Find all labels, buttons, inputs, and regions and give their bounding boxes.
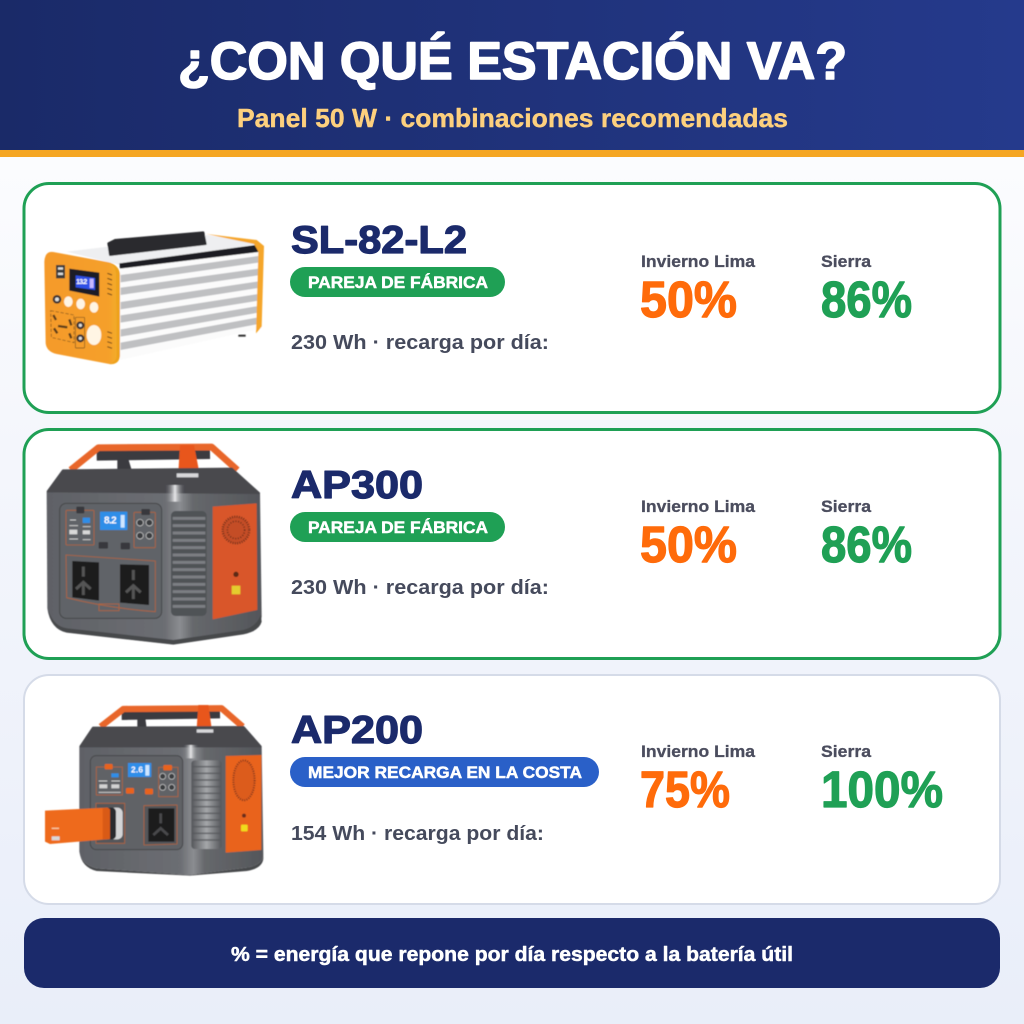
stat: sierra: 100% — [821, 761, 943, 818]
footer note: % = energía que repone por día respecto a la batería útil — [231, 944, 793, 966]
stat: invierno Lima — [640, 497, 756, 573]
stat: invierno Lima: 50% — [640, 271, 737, 328]
badge: pareja de fábrica — [290, 512, 505, 542]
stat: sierra — [821, 497, 912, 573]
panel: AP200 — [24, 675, 1000, 904]
badge: mejor recarga en la costa: MEJOR RECARGA EN LA COSTA — [308, 763, 582, 782]
subtitle: Panel 50 W · combinaciones recomendadas — [237, 103, 788, 133]
panel: AP300 — [24, 430, 1000, 658]
model name: AP300 — [291, 464, 423, 507]
panel: SL-82-L2 — [24, 184, 1000, 412]
stat: sierra: Sierra — [821, 742, 872, 761]
badge: pareja de fábrica: PAREJA DE FÁBRICA — [308, 273, 488, 292]
badge: pareja de fábrica — [290, 267, 505, 297]
footer note — [24, 918, 1000, 988]
product image: AP200 station: 2.6 — [131, 765, 143, 775]
capacity line: 230 Wh · recarga por día: — [291, 332, 549, 354]
product image: SL-82-L2 station: 13.2 — [76, 277, 87, 286]
title: ¿CON QUÉ ESTACIÓN VA? — [178, 31, 847, 91]
product image: AP300 station: 8.2 — [104, 515, 117, 526]
badge: mejor recarga en la costa — [290, 757, 599, 787]
stat: invierno Lima: 50% — [640, 516, 737, 573]
stat: invierno Lima — [640, 742, 756, 818]
capacity line: 154 Wh · recarga por día: — [291, 823, 544, 845]
header band — [0, 0, 1024, 157]
capacity line: 230 Wh · recarga por día: — [291, 577, 549, 599]
stat: sierra: 86% — [821, 271, 912, 328]
model name: AP200 — [291, 709, 423, 752]
stat: invierno Lima: Invierno Lima — [641, 742, 756, 761]
stat: invierno Lima: Invierno Lima — [641, 252, 756, 271]
product image: AP300 station — [47, 445, 262, 645]
stat: invierno Lima — [640, 252, 756, 328]
product image: SL-82-L2 station — [44, 232, 264, 364]
stat: sierra — [821, 252, 912, 328]
badge: pareja de fábrica: PAREJA DE FÁBRICA — [308, 518, 488, 537]
product image: AP200 station — [45, 705, 263, 876]
stat: sierra: Sierra — [821, 252, 872, 271]
model name: SL-82-L2 — [291, 219, 467, 262]
stat: sierra: Sierra — [821, 497, 872, 516]
stat: invierno Lima: Invierno Lima — [641, 497, 756, 516]
stat: invierno Lima: 75% — [640, 761, 730, 818]
stat: sierra: 86% — [821, 516, 912, 573]
